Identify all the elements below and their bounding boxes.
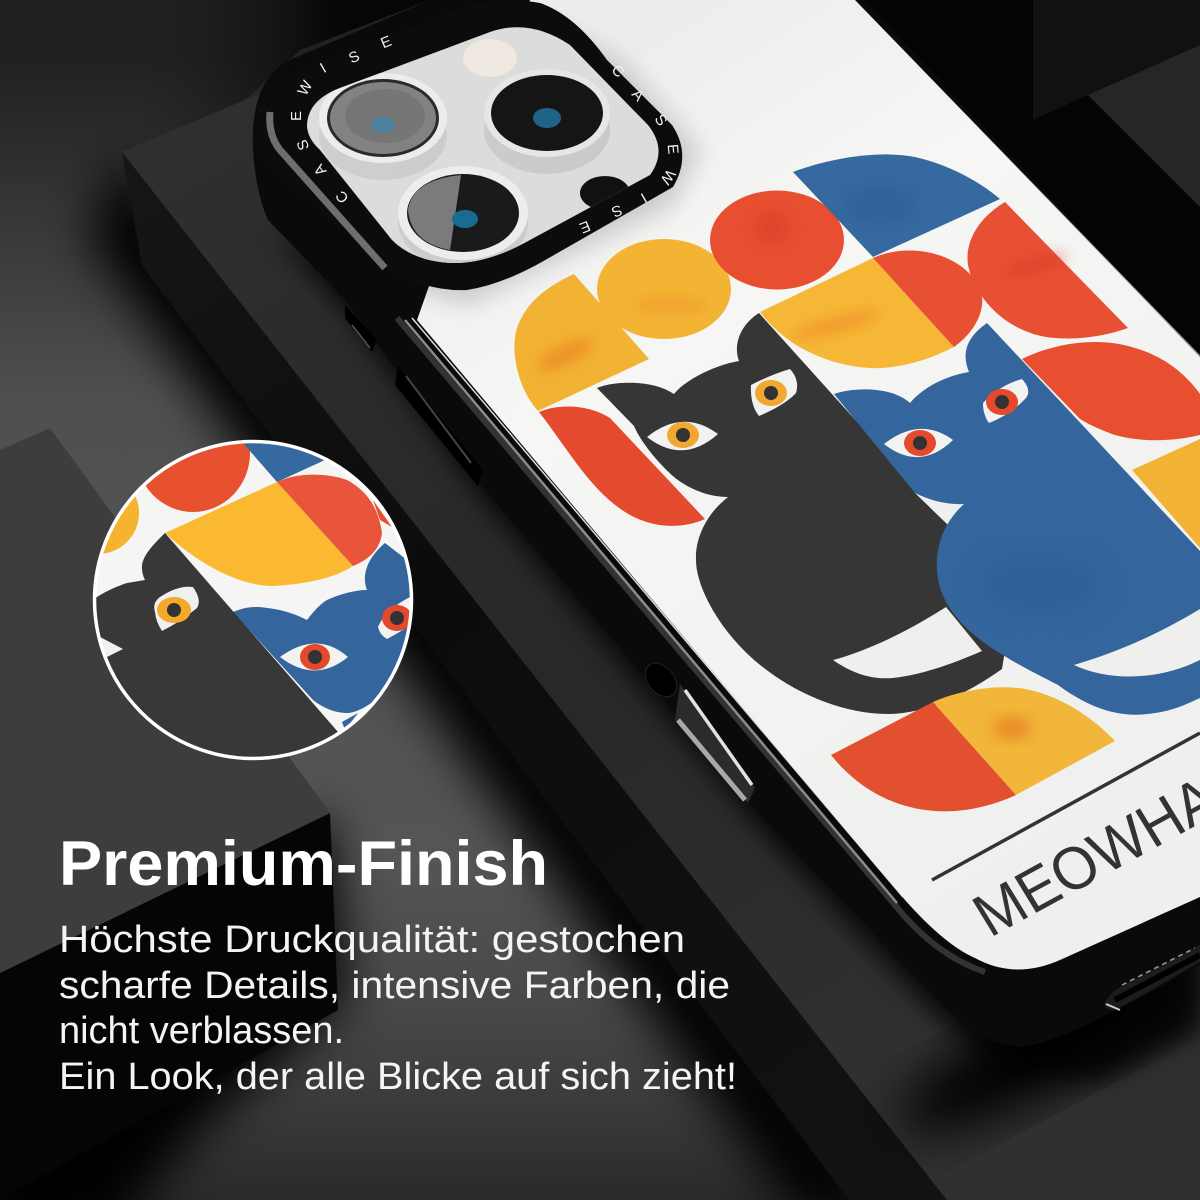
CASEWISE ring lettering: E [577, 217, 593, 236]
camera island [253, 0, 682, 290]
description: Ein Look, der alle Blicke auf sich zieht! [59, 1056, 737, 1098]
CASEWISE ring lettering: A [628, 86, 647, 105]
description [59, 919, 737, 1098]
CASEWISE ring lettering: E [664, 143, 681, 155]
lens: upper right [484, 69, 610, 174]
CASEWISE ring lettering: W [295, 77, 317, 99]
bottom shape blotch [992, 716, 1032, 740]
CASEWISE ring lettering: S [346, 48, 362, 67]
case body [253, 0, 1200, 1047]
detail: blue cat eye right [378, 597, 416, 639]
island shadow on panel [424, 32, 704, 311]
flash [463, 39, 517, 77]
lens: lower [398, 166, 528, 269]
blue cat tail gap [1074, 609, 1200, 676]
frame gloss [270, 112, 385, 268]
camera glass [307, 27, 659, 263]
shape: red right segment [967, 202, 1128, 339]
printed back panel [417, 0, 1200, 970]
shape: red right upper [1022, 342, 1200, 440]
CASEWISE ring lettering [288, 33, 681, 236]
gap under blue cat head [915, 493, 948, 524]
black cat [597, 313, 1010, 714]
detail: red segment [277, 475, 382, 566]
CASEWISE ring lettering: E [288, 111, 305, 121]
detail: small blue corner [342, 713, 358, 730]
text block: heading and description [59, 829, 737, 1098]
black cat eye right [751, 369, 797, 416]
case edge highlights [397, 0, 1200, 972]
heading: Premium-Finish [59, 829, 548, 899]
CASEWISE ring lettering: A [311, 161, 330, 179]
detail: yellow circle [103, 496, 139, 554]
divider line [932, 733, 1200, 880]
description: Höchste Druckqualität: gestochen [59, 919, 685, 961]
detail: blue cat eye left [280, 644, 348, 670]
detail: black cat [90, 533, 338, 770]
detail: blue cat [233, 543, 416, 713]
phone case [253, 0, 1200, 1047]
camera frame [253, 0, 682, 290]
detail: left eye fragment [92, 637, 123, 664]
shape: yellow right [1132, 439, 1200, 548]
description: scharfe Details, intensive Farben, die [59, 965, 730, 1007]
shape: yellow quarter [514, 274, 649, 411]
detail circle border [94, 442, 412, 758]
CASEWISE ring lettering: C [608, 62, 628, 81]
CASEWISE ring lettering: C [332, 187, 352, 206]
microphone hole [580, 176, 628, 207]
CASEWISE ring lettering: I [317, 60, 329, 77]
lens: upper left [319, 73, 447, 180]
shape: red bottom [831, 702, 1016, 811]
black cat tail gap [833, 607, 982, 678]
detail: red circle [146, 444, 250, 512]
bottom port [1104, 945, 1200, 1010]
blue cat eye left [884, 429, 953, 457]
shape: red middle [873, 251, 982, 347]
detail: blue shape [244, 443, 324, 482]
shape: yellow bottom [933, 687, 1115, 795]
detail: black cat eye [154, 587, 199, 631]
side buttons [345, 305, 755, 803]
description: nicht verblassen. [59, 1010, 344, 1052]
detail: red sliver [373, 500, 392, 527]
CASEWISE ring lettering: S [609, 201, 625, 220]
texture blotches [536, 216, 1071, 374]
shape: yellow circle [597, 239, 731, 339]
shape: yellow middle [760, 258, 954, 368]
CASEWISE ring lettering: S [651, 111, 670, 129]
shape: red lower left [539, 406, 705, 526]
blue cat eye right [983, 379, 1028, 423]
shape: blue half circle [793, 154, 1000, 257]
CASEWISE ring lettering: I [638, 189, 650, 206]
black cat eye left [647, 422, 718, 450]
magnified detail circle [92, 440, 414, 760]
artwork: cats and geometric shapes [373, 20, 1200, 949]
phone shadow [270, 230, 1200, 1160]
CASEWISE ring lettering: E [378, 33, 394, 52]
shape: red circle [710, 190, 844, 290]
CASEWISE ring lettering: S [294, 137, 313, 152]
CASEWISE ring lettering: W [656, 166, 679, 188]
detail: yellow segment [165, 482, 353, 586]
blue cat texture [980, 555, 1100, 615]
blue cat [834, 323, 1200, 715]
